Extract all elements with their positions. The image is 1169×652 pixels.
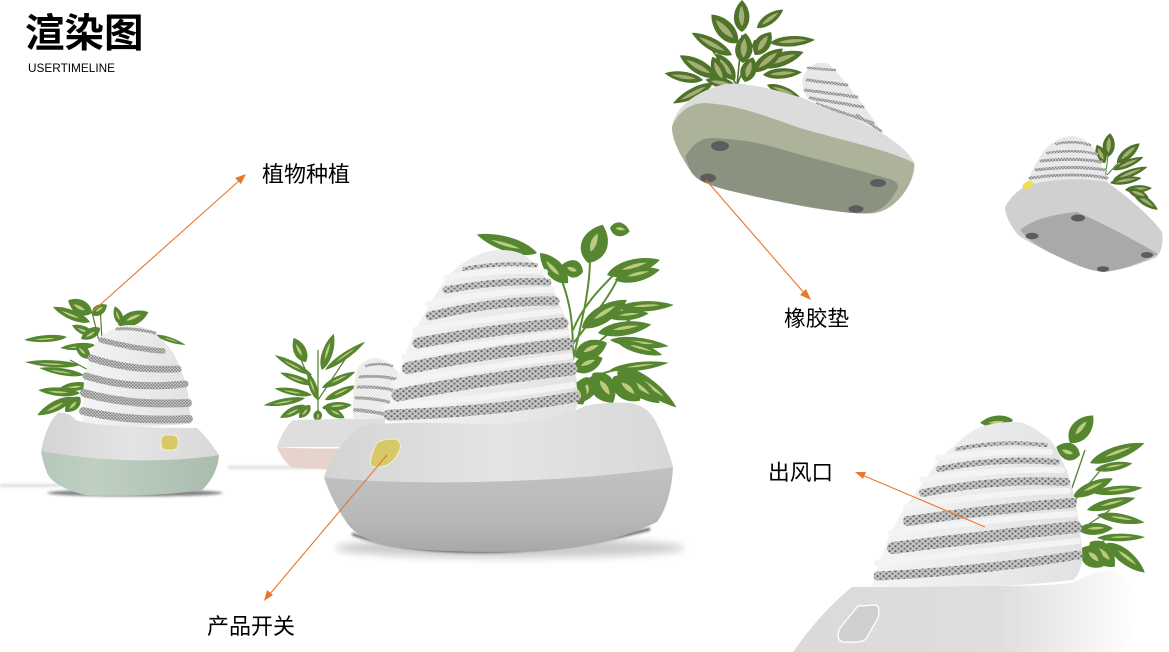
arrow: rubber pad xyxy=(706,180,811,300)
product render: large front unit xyxy=(324,220,685,558)
white upper shell xyxy=(672,84,915,213)
rubber feet xyxy=(1026,214,1153,272)
arrow: product switch xyxy=(264,455,387,601)
overhanging ledges xyxy=(386,271,573,407)
pot xyxy=(1005,179,1163,272)
product render: underside view, far right xyxy=(1005,133,1163,272)
plant xyxy=(1092,133,1160,213)
switch xyxy=(370,439,400,467)
label: plant growing: 植物种植 xyxy=(262,162,350,187)
dome xyxy=(82,325,190,428)
rubber feet xyxy=(700,141,886,213)
overhanging ledges xyxy=(877,452,1078,563)
dome xyxy=(802,63,883,134)
label: product switch: 产品开关 xyxy=(207,614,295,639)
pot lower shell xyxy=(41,451,219,496)
switch xyxy=(1021,179,1035,191)
product render: pink unit in the background xyxy=(228,332,398,469)
product render: underside view with plant, top right xyxy=(664,0,915,213)
dome xyxy=(353,358,398,418)
base panel xyxy=(685,138,898,213)
pot upper shell xyxy=(41,413,219,460)
pot lower shell xyxy=(324,467,673,552)
dome xyxy=(386,250,578,426)
arrow: air outlet xyxy=(855,472,985,527)
plant xyxy=(24,294,186,420)
product render: green unit on the left xyxy=(0,294,223,496)
pot xyxy=(277,418,385,469)
arrow: plant growing xyxy=(92,174,246,312)
switch xyxy=(161,435,178,450)
dome xyxy=(1027,136,1108,190)
dome xyxy=(872,422,1082,586)
subtitle: USERTIMELINE xyxy=(28,61,115,75)
ground shadow xyxy=(228,466,328,469)
pot xyxy=(793,570,1137,652)
plant xyxy=(263,332,367,422)
label: air outlet: 出风口 xyxy=(768,460,833,485)
pot upper shell xyxy=(324,403,673,482)
switch outline xyxy=(838,605,879,642)
green rim xyxy=(672,103,914,213)
title: 渲染图 xyxy=(25,2,144,59)
base panel xyxy=(1020,212,1158,272)
plant xyxy=(980,409,1149,578)
plant xyxy=(664,0,815,108)
ground shadow xyxy=(0,484,223,496)
plant xyxy=(475,220,681,413)
product render: close-up of air outlet, bottom right xyxy=(793,409,1149,652)
ground shadow xyxy=(335,529,685,558)
label: rubber pad: 橡胶垫 xyxy=(784,306,849,331)
